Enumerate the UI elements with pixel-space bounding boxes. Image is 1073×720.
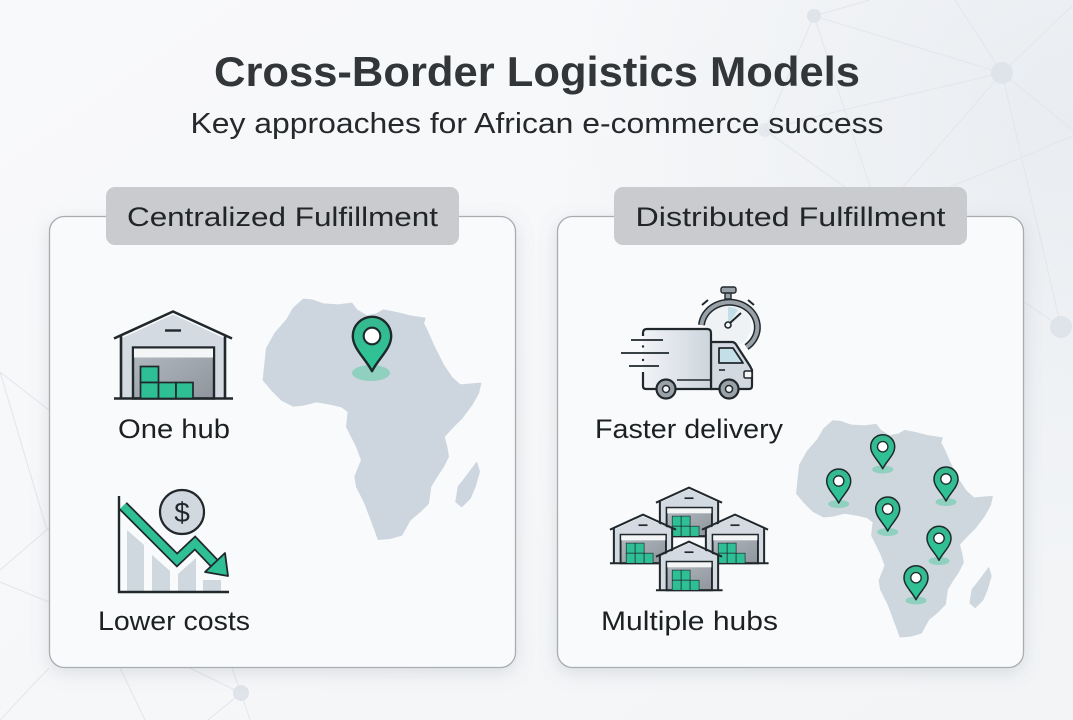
icon: falling costs chart: $ <box>174 497 190 528</box>
title: Cross-Border Logistics Models <box>214 48 860 95</box>
icon: delivery truck with stopwatch <box>621 287 757 398</box>
label: one hub: One hub <box>118 414 230 444</box>
panel heading tab: Distributed Fulfillment <box>636 202 946 232</box>
truck body <box>711 342 752 389</box>
panel heading tab <box>106 187 459 245</box>
panel: centralized fulfillment <box>50 187 516 668</box>
panel card <box>558 216 1024 668</box>
map: Africa with multiple hubs <box>797 421 992 637</box>
icon: falling costs chart <box>119 490 229 592</box>
label: faster delivery: Faster delivery <box>595 414 784 444</box>
label: lower costs: Lower costs <box>98 606 250 636</box>
panel heading tab: Centralized Fulfillment <box>127 202 439 232</box>
subtitle: Key approaches for African e-commerce success <box>190 108 884 140</box>
icon: warehouse <box>114 312 233 398</box>
stopwatch <box>702 287 757 348</box>
panel card <box>50 216 516 668</box>
label: multiple hubs: Multiple hubs <box>601 606 778 636</box>
icon: multiple warehouses <box>610 488 769 590</box>
panel: distributed fulfillment <box>558 187 1024 668</box>
map: Africa with one hub <box>263 299 481 539</box>
panel heading tab <box>614 187 967 245</box>
